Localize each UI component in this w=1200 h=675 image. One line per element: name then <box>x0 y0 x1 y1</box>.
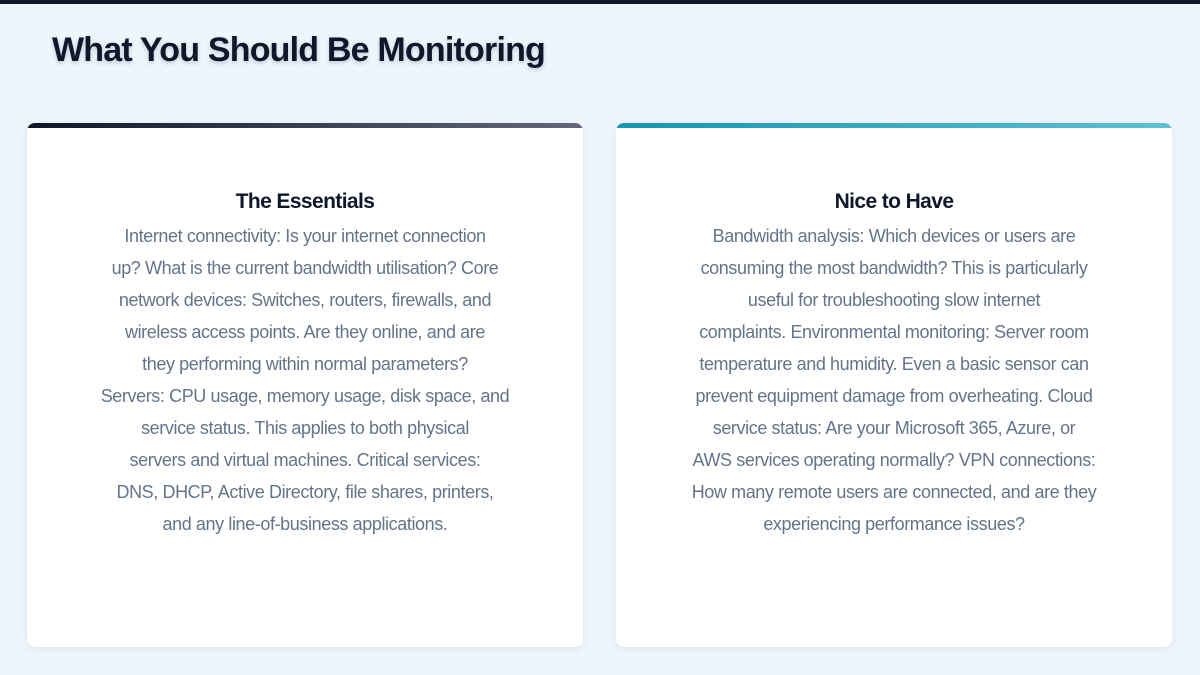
text: essentials: and any line-of-business applications. <box>162 514 447 534</box>
text: essentials: Servers: CPU usage, memory usage, disk space, and <box>101 386 509 406</box>
text: essentials: servers and virtual machines. Critical services: <box>130 450 480 470</box>
heading: nice to have: Nice to Have <box>835 190 953 213</box>
text: essentials: Internet connectivity: Is your internet connection <box>124 226 486 246</box>
text: essentials <box>101 226 509 534</box>
heading: essentials: The Essentials <box>236 190 374 213</box>
text: nice to have: service status: Are your Microsoft 365, Azure, or <box>713 418 1075 438</box>
text: essentials: they performing within normal parameters? <box>142 354 468 374</box>
text: essentials: wireless access points. Are they online, and are <box>125 322 485 342</box>
text: essentials: DNS, DHCP, Active Directory, file shares, printers, <box>116 482 494 502</box>
text: nice to have: complaints. Environmental monitoring: Server room <box>699 322 1089 342</box>
text: essentials: up? What is the current bandwidth utilisation? Core <box>112 258 498 278</box>
text: essentials: network devices: Switches, routers, firewalls, and <box>119 290 491 310</box>
text: essentials: service status. This applies to both physical <box>141 418 469 438</box>
text: nice to have: experiencing performance issues? <box>763 514 1025 534</box>
text: nice to have: AWS services operating normally? VPN connections: <box>693 450 1095 470</box>
text: nice to have: prevent equipment damage from overheating. Cloud <box>695 386 1093 406</box>
panel: nice to have <box>616 123 1172 647</box>
title: What You Should Be Monitoring <box>52 31 545 69</box>
text: nice to have: consuming the most bandwidth? This is particularly <box>701 258 1087 278</box>
text: nice to have: useful for troubleshooting slow internet <box>748 290 1040 310</box>
panel: essentials <box>27 123 583 647</box>
text: nice to have: temperature and humidity. Even a basic sensor can <box>699 354 1089 374</box>
text: nice to have: How many remote users are connected, and are they <box>692 482 1096 502</box>
text: nice to have <box>692 226 1097 534</box>
text: nice to have: Bandwidth analysis: Which devices or users are <box>713 226 1075 246</box>
